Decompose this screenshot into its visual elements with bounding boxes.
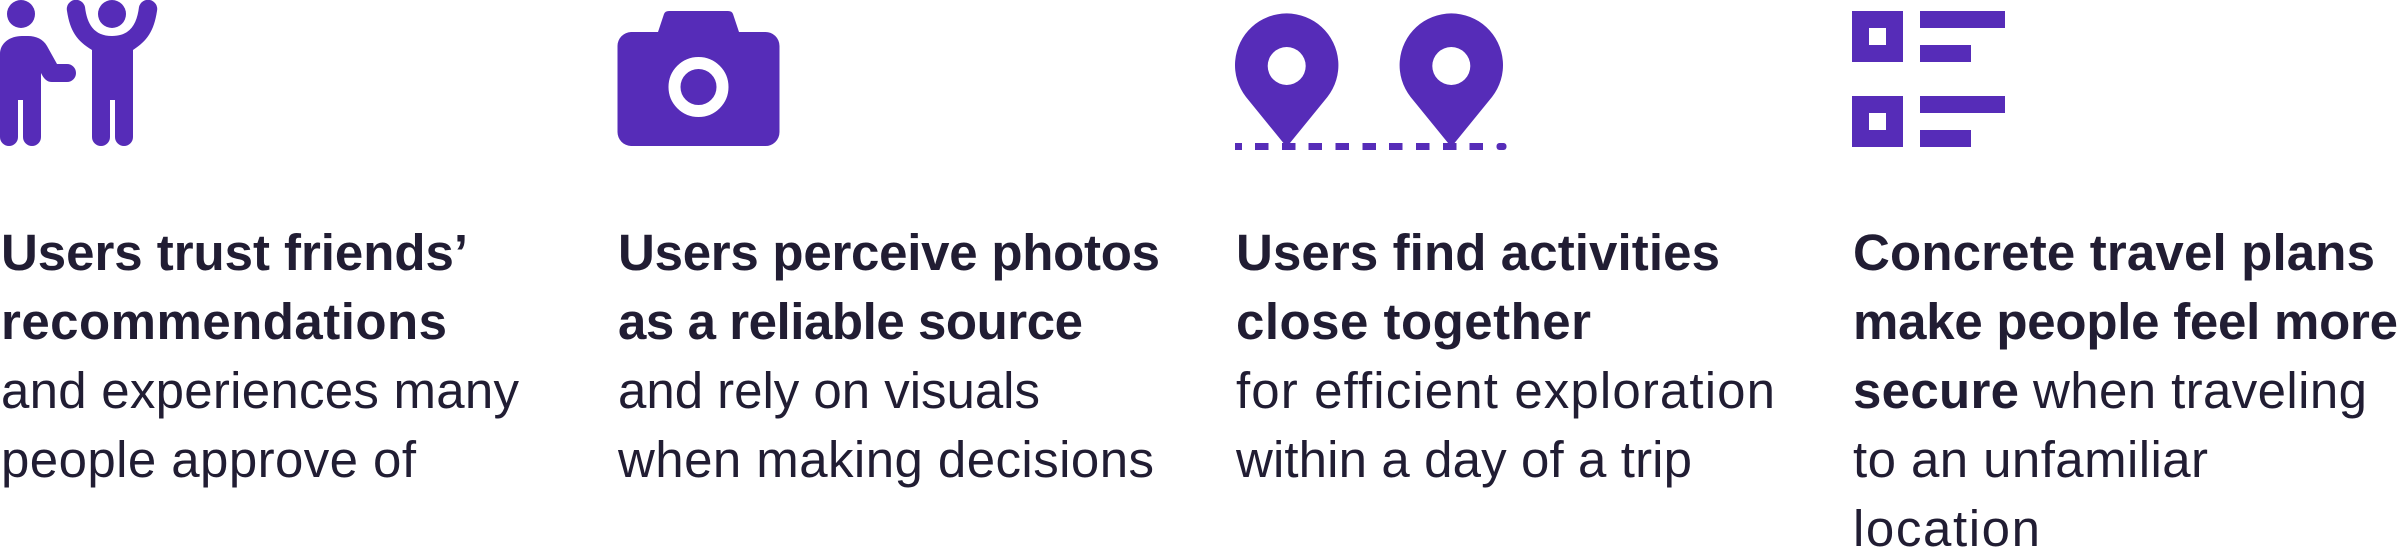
panel: photos bbox=[617, 11, 1160, 488]
panel: friends' recommendations bbox=[0, 0, 520, 488]
panel: activities bbox=[1235, 13, 1775, 488]
text: photos: Users perceive photos bbox=[618, 224, 1160, 281]
text: travel plans: to an unfamiliar bbox=[1853, 431, 2208, 488]
text: activities: close together bbox=[1236, 293, 1591, 350]
text: travel plans: secure bbox=[1853, 362, 2019, 419]
icon: two people bbox=[0, 0, 157, 146]
text: activities: Users find activities bbox=[1236, 224, 1720, 281]
text: photos: and rely on visuals bbox=[618, 362, 1040, 419]
text: travel plans: when traveling bbox=[2032, 362, 2367, 419]
text: friends' recommendations: Users trust friends’ bbox=[1, 224, 468, 281]
text: friends' recommendations: people approve of bbox=[1, 431, 417, 488]
text: photos: as a reliable source bbox=[618, 293, 1083, 350]
text: travel plans bbox=[1853, 224, 2398, 547]
text: photos: when making decisions bbox=[617, 431, 1154, 488]
text: activities: within a day of a trip bbox=[1235, 431, 1692, 488]
text: friends' recommendations bbox=[1, 224, 520, 488]
panel: travel plans bbox=[1852, 11, 2398, 547]
text: friends' recommendations: recommendations bbox=[1, 293, 447, 350]
text: friends' recommendations: and experiences many bbox=[1, 362, 520, 419]
text: activities bbox=[1235, 224, 1775, 488]
text: travel plans: make people feel more bbox=[1853, 293, 2398, 350]
text: activities: for efficient exploration bbox=[1236, 362, 1775, 419]
text: photos bbox=[617, 224, 1160, 488]
text: travel plans: Concrete travel plans bbox=[1853, 224, 2375, 281]
icon: checklist bbox=[1852, 11, 2005, 147]
icon: camera bbox=[618, 11, 780, 146]
icon: map pins on dashed route bbox=[1235, 13, 1506, 150]
